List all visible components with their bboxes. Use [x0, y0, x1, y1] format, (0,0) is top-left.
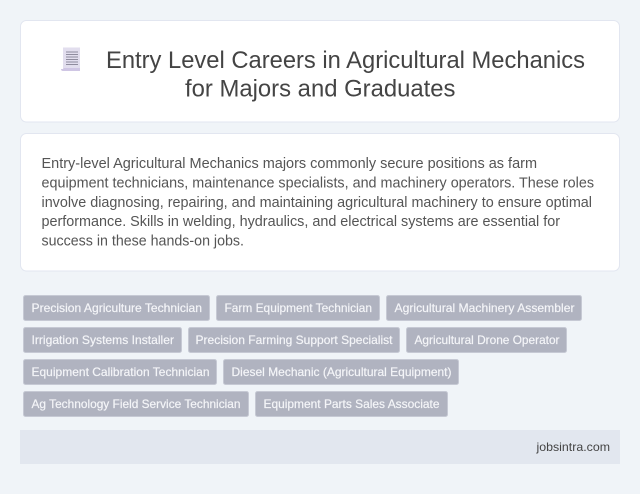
tag: Irrigation Systems Installer: Irrigation Systems Installer [32, 333, 174, 347]
footer [20, 430, 620, 464]
tag: Farm Equipment Technician [216, 296, 380, 320]
tag: Equipment Calibration Technician: Equipment Calibration Technician [32, 365, 210, 379]
icon: document scroll [61, 48, 80, 71]
title: Entry Level Careers in Agricultural Mechanics [106, 47, 585, 74]
text block: description: Entry-level Agricultural Mechanics majors commonly secure positions as farm [42, 156, 537, 172]
panel: description [20, 134, 620, 271]
tag: Ag Technology Field Service Technician [24, 392, 248, 416]
tag: Ag Technology Field Service Technician: Ag Technology Field Service Technician [32, 397, 240, 411]
footer source text: jobsintra.com [535, 440, 610, 454]
text block: description: equipment technicians, maintenance specialists, and machinery operators. These roles [42, 176, 594, 192]
tag: Agricultural Machinery Assembler: Agricultural Machinery Assembler [394, 301, 574, 315]
tag list: job titles [24, 296, 582, 416]
tag: Diesel Mechanic (Agricultural Equipment) [224, 360, 458, 384]
text block: description: performance. Skills in welding, hydraulics, and electrical systems are essential for [42, 214, 560, 230]
title [106, 47, 585, 102]
tag: Equipment Calibration Technician [24, 360, 216, 384]
tag: Precision Agriculture Technician [24, 296, 210, 320]
tag: Equipment Parts Sales Associate: Equipment Parts Sales Associate [264, 397, 440, 411]
tag: Agricultural Drone Operator [406, 328, 566, 352]
tag: Irrigation Systems Installer [24, 328, 182, 352]
tag: Precision Agriculture Technician: Precision Agriculture Technician [32, 301, 202, 315]
tag: Precision Farming Support Specialist: Precision Farming Support Specialist [196, 333, 393, 347]
text block: description [42, 156, 594, 250]
tag: Agricultural Drone Operator: Agricultural Drone Operator [414, 333, 560, 347]
tag: Equipment Parts Sales Associate [256, 392, 448, 416]
tag: Agricultural Machinery Assembler [386, 296, 582, 320]
text block: description: success in these hands-on jobs. [42, 234, 244, 250]
tag: Precision Farming Support Specialist [188, 328, 400, 352]
tag: Farm Equipment Technician: Farm Equipment Technician [224, 301, 372, 315]
text block: description: involve diagnosing, repairing, and maintaining agricultural machinery to ensure optimal [42, 195, 592, 211]
tag: Diesel Mechanic (Agricultural Equipment): Diesel Mechanic (Agricultural Equipment) [232, 365, 452, 379]
title: for Majors and Graduates [185, 76, 456, 102]
panel: header card [20, 20, 620, 122]
